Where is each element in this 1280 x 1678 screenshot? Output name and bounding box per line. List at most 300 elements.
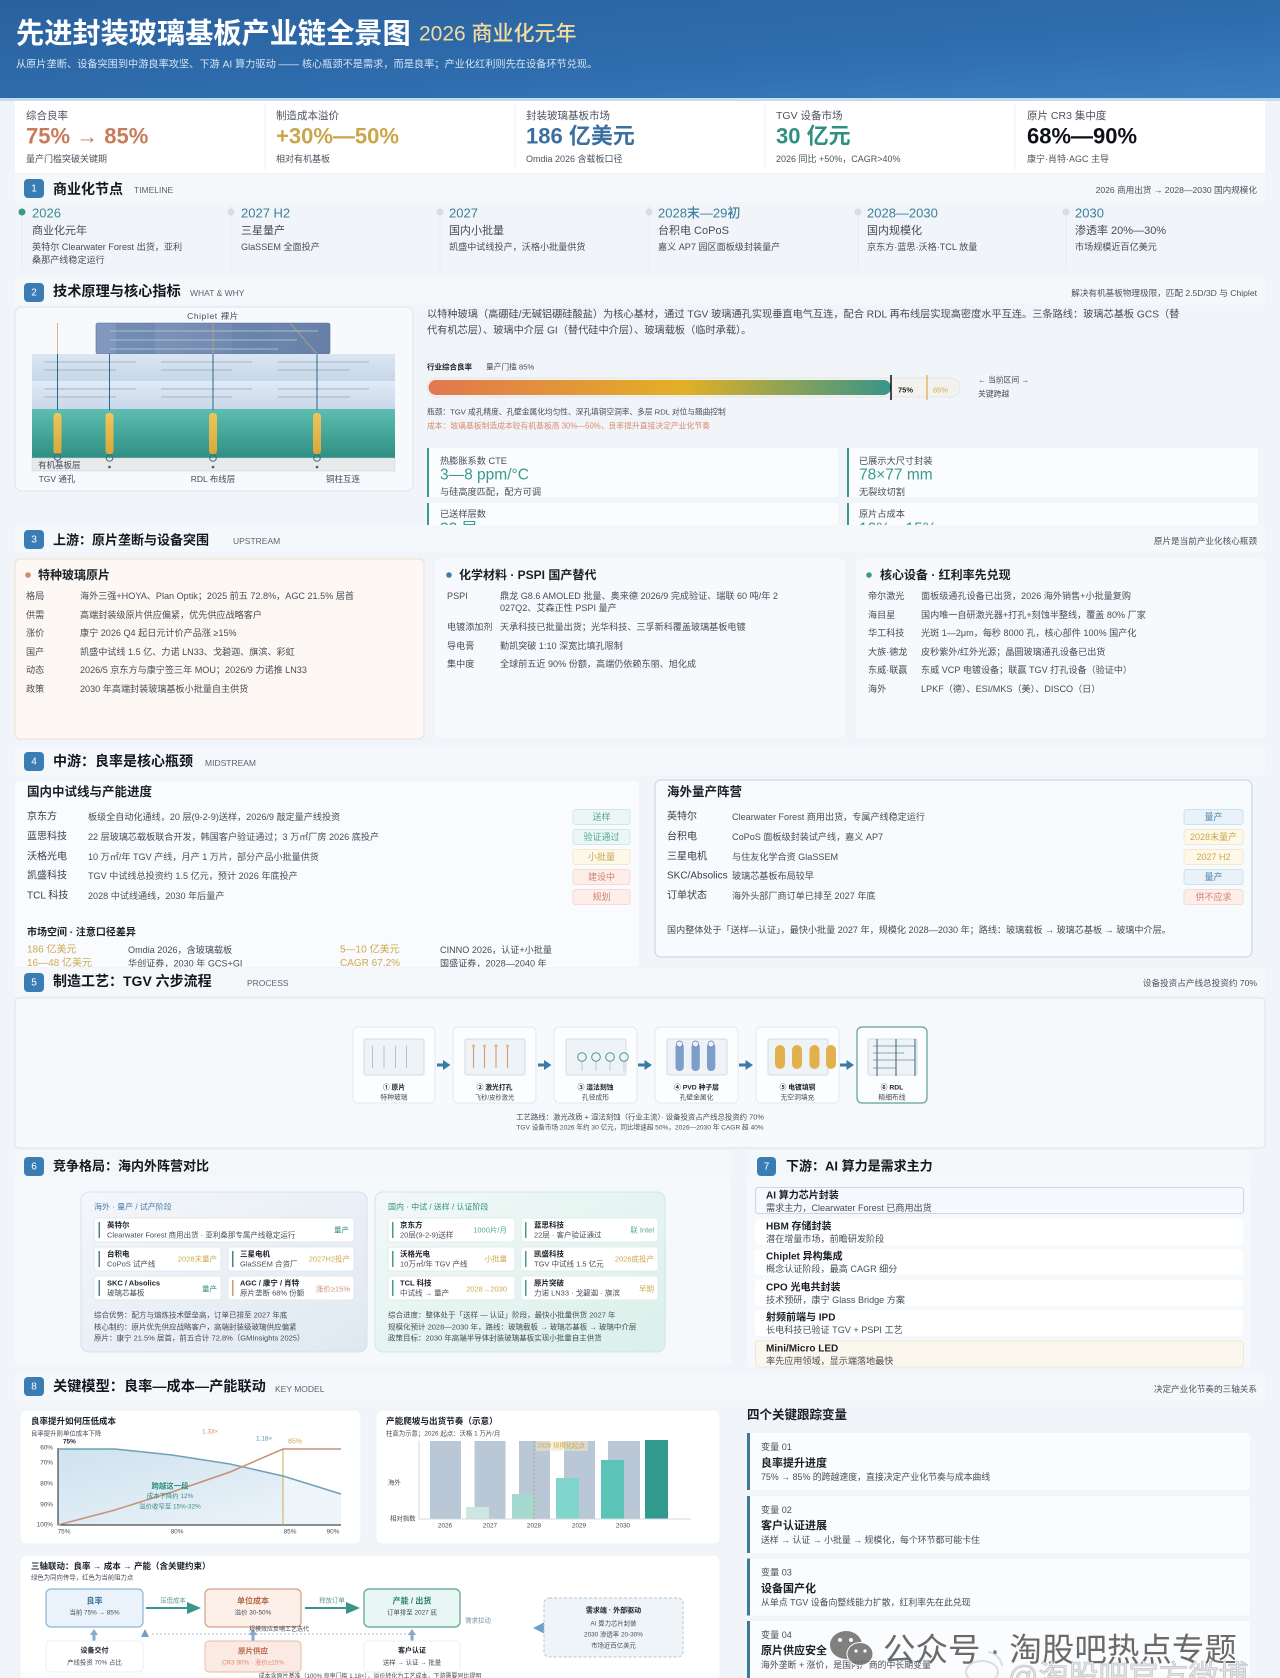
chart annotation <box>139 1482 201 1510</box>
watermark <box>830 1631 1248 1678</box>
company cards: 沃格光电 <box>400 1248 430 1258</box>
bottleneck and cost notes: 成本：玻璃基板制造成本较有机基板高 30%—50%，良率提升直接决定产业化节奏 <box>427 420 710 430</box>
market space notes: 16—48 亿美元 <box>27 956 92 969</box>
icon: wechat <box>830 1631 873 1666</box>
metric: raw glass cost share: 10%—15% <box>859 520 937 538</box>
market space notes: 国盛证券，2028—2040 年 <box>440 958 547 968</box>
section 1 heading: 商业化节点 <box>53 181 123 197</box>
y axis labels: 90% <box>40 1502 53 1508</box>
company cards: 玻璃芯基板 <box>107 1288 145 1298</box>
glass substrate cross-section diagram <box>15 307 413 491</box>
section 6 heading <box>15 1150 731 1177</box>
RDL layers <box>32 354 395 409</box>
yield line <box>58 1449 341 1525</box>
overseas rows: 玻璃芯基板布局较早 <box>732 870 814 881</box>
demand: CPO: CPO 光电共封装 <box>766 1280 840 1294</box>
table rows: 供需 <box>26 609 44 620</box>
bottleneck and cost notes <box>427 406 726 430</box>
company cards: 涨价≥15% <box>316 1284 350 1294</box>
technology description: 代有机芯层）、玻璃中介层 GI（替代硅中介层）、玻璃载板（临时承载）。 <box>427 324 751 336</box>
x axis labels: 90% <box>327 1528 340 1536</box>
panel: special glass <box>15 559 424 739</box>
company cards: 量产 <box>334 1224 349 1234</box>
table rows: 华工科技 <box>868 627 904 638</box>
table rows: 动态 <box>26 664 44 675</box>
company cards <box>94 1218 354 1300</box>
table rows: 东威·联赢 <box>868 664 907 675</box>
chart labels: 相对指数 <box>390 1514 416 1522</box>
demand: Chiplet: 概念认证阶段，最高 CAGR 细分 <box>766 1263 897 1274</box>
section 3 heading: UPSTREAM <box>233 536 280 546</box>
KPI: substrate market <box>526 109 635 164</box>
chiplet die <box>96 311 330 354</box>
KPI: TGV market <box>776 109 901 164</box>
KPI: TGV market: 2026 同比 +50%，CAGR>40% <box>776 153 901 164</box>
arrow: demand <box>533 1622 544 1634</box>
process notes: TGV 设备市场 2026 年约 30 亿元，同比增速超 50%，2026—2030 年 CAGR 超 40% <box>516 1122 764 1132</box>
overseas rows: 2028末量产 <box>1190 831 1237 842</box>
KPI: substrate market: Omdia 2026 含载板口径 <box>526 153 623 164</box>
chart: capacity ramp <box>376 1410 720 1544</box>
domestic summary <box>388 1310 637 1342</box>
milestone 2030 <box>1075 206 1166 252</box>
market space notes: CINNO 2026，认证+小批量 <box>440 944 552 955</box>
variable 04 <box>747 1621 1250 1678</box>
chart labels: 2029 <box>572 1522 587 1530</box>
variable 04: 原片供应安全 <box>761 1643 827 1657</box>
section 1 heading: TIMELINE <box>134 185 174 195</box>
progress rows: 京东方 <box>27 810 57 822</box>
data callouts: 85% <box>288 1438 302 1446</box>
chart: yield vs cost: 良率提升则单位成本下降 <box>31 1428 102 1438</box>
domestic summary: 政策目标：2030 年高端半导体封装玻璃基板实现小批量自主供货 <box>388 1332 602 1342</box>
step 3: 孔径成形 <box>582 1092 609 1102</box>
watermark: 公众号 · 淘股吧热点专题 <box>883 1632 1237 1668</box>
company cards: 2026底投产 <box>615 1254 654 1264</box>
demand: CPO <box>755 1280 1243 1306</box>
node: glass supply: 原片供应 <box>238 1646 268 1656</box>
section 2 heading: 技术原理与核心指标 <box>53 283 181 300</box>
panel: core equipment: 核心设备 · 红利率先兑现 <box>880 567 1011 582</box>
metric: CTE: 3—8 ppm/°C <box>440 466 529 484</box>
overseas bars <box>430 1441 640 1519</box>
panel: overseas mass production: 海外量产阵营 <box>667 784 742 799</box>
technology description <box>427 308 1179 336</box>
TGV process flow <box>15 998 1265 1148</box>
overseas rows: CoPoS 面板级封装试产线，嘉义 AP7 <box>732 831 883 842</box>
step 4: 孔壁金属化 <box>680 1092 714 1102</box>
demand: HBM <box>755 1219 1243 1245</box>
metric cards <box>427 448 1258 525</box>
KPI: CR3: 原片 CR3 集中度 <box>1027 109 1107 122</box>
KPI: CR3: 康宁·肖特·AGC 主导 <box>1027 153 1109 164</box>
table rows: LPKF（德）、ESI/MKS（美）、DISCO（日） <box>921 683 1100 694</box>
metric: CTE: 热膨胀系数 CTE <box>440 455 507 466</box>
section 3 heading: 3 <box>31 534 37 546</box>
company cards: CoPoS 试产线 <box>107 1258 156 1268</box>
panel: chemical materials <box>435 559 845 738</box>
data callouts: 1.33× <box>202 1428 218 1436</box>
table rows: 格局 <box>26 590 44 601</box>
arrow: release orders <box>305 1596 360 1614</box>
arrow: lower cost <box>146 1596 201 1614</box>
node: yield <box>46 1589 143 1627</box>
progress rows: 规划 <box>592 891 611 902</box>
y axis labels: 80% <box>40 1480 53 1488</box>
y axis labels: 70% <box>40 1460 53 1466</box>
data callouts <box>63 1428 302 1446</box>
company cards: 22层 · 客户验证通过 <box>534 1230 602 1240</box>
company cards: 三星电机 <box>240 1248 270 1258</box>
x axis labels <box>58 1528 340 1536</box>
milestone 2026: 英特尔 Clearwater Forest 出货，亚利 <box>32 241 182 252</box>
KPI: cost premium: +30%—50% <box>276 124 399 148</box>
milestone 2028-29: 2028末—29初 <box>658 206 740 220</box>
table rows: 勤凯突破 1:10 深宽比填孔限制 <box>500 640 623 651</box>
overseas rows: 三星电机 <box>667 850 707 862</box>
section 4 heading: 4 <box>31 756 37 768</box>
chart labels: 2030 <box>616 1522 631 1530</box>
section 1 heading <box>15 175 1265 202</box>
feedback arrows: 规模效应反哺工艺迭代 <box>249 1625 309 1633</box>
company cards: 力诺 LN33 · 戈碧迦 · 旗滨 <box>534 1288 620 1298</box>
section 7 heading <box>747 1150 1251 1177</box>
company cards: Clearwater Forest 商用出货 · 亚利桑那专属产线稳定运行 <box>107 1230 296 1240</box>
arrow <box>538 1060 552 1070</box>
milestone 2027: 国内小批量 <box>449 223 504 237</box>
node: equipment delivery <box>46 1641 143 1672</box>
table rows: 鼎龙 G8.6 AMOLED 批量、奥来德 2026/9 完成验证、瑞联 60 吨/年 2 <box>500 590 778 601</box>
chart: capacity ramp: 柱高为示意；2026 起点：沃格 1 万片/月 <box>386 1428 500 1438</box>
domestic summary: 国内整体处于「送样—认证」，最快小批量 2027 年，规模化 2028—2030 年；路线：玻璃载板 → 玻璃芯基板 → 玻璃中介层。 <box>667 924 1171 935</box>
chart labels: 海外 <box>388 1478 401 1486</box>
demand: RF and IPD: 长电科技已验证 TGV + PSPI 工艺 <box>766 1324 903 1335</box>
section 2 heading: 解决有机基板物理极限，匹配 2.5D/3D 与 Chiplet <box>1071 287 1258 298</box>
overseas summary: 综合优势：配方与熔炼技术壁垒高，订单已排至 2027 年底 <box>94 1310 288 1320</box>
section 6: competition panel <box>15 1150 731 1365</box>
cost line <box>58 1449 341 1494</box>
progress rows: 沃格光电 <box>27 850 67 862</box>
node: equipment delivery: 设备交付 <box>80 1646 108 1654</box>
progress rows: 送样 <box>592 811 611 822</box>
milestone 2027 H2: 2027 H2 <box>241 206 290 220</box>
arrow <box>739 1060 753 1070</box>
chart labels: 2028 规模化起点 <box>537 1440 586 1450</box>
variable 04: 变量 04 <box>761 1629 792 1640</box>
chart labels: 2026 <box>438 1522 453 1530</box>
company cards: 量产 <box>202 1284 217 1294</box>
yield progress bar: 行业综合良率 <box>427 362 472 372</box>
variable 03: 变量 03 <box>761 1566 792 1578</box>
node: demand: 市场近百亿美元 <box>591 1640 636 1650</box>
yield progress bar <box>427 362 1029 400</box>
step 1: 特种玻璃 <box>380 1092 408 1102</box>
metric: raw glass cost share: 原片占成本 <box>859 508 905 519</box>
section 6 heading: 竞争格局：海内外阵营对比 <box>53 1158 209 1174</box>
company cards: 台积电 <box>107 1248 130 1258</box>
data callouts: 75% <box>63 1438 76 1446</box>
company cards: 联 Intel <box>630 1226 654 1234</box>
table rows: 027Q2、艾森正性 PSPI 量产 <box>500 602 617 613</box>
chart labels <box>388 1440 631 1530</box>
market space notes: 市场空间 · 注意口径差异 <box>27 926 136 938</box>
panel: special glass: 特种玻璃原片 <box>38 567 110 582</box>
progress rows: TGV 中试线总投资约 1.5 亿元，预计 2026 年底投产 <box>88 870 298 881</box>
metric: layers: 22 层 <box>440 520 477 538</box>
node: capacity <box>364 1589 460 1627</box>
milestone 2026: 2026 <box>32 206 61 220</box>
milestone 2026 <box>32 206 182 265</box>
node: glass supply <box>205 1641 301 1672</box>
KPI: yield: 量产门槛突破关键期 <box>26 153 107 164</box>
arrow <box>638 1060 652 1070</box>
demand: Mini/Micro LED: Mini/Micro LED <box>766 1344 838 1354</box>
node: customer certification: 送样 → 认证 → 批量 <box>383 1658 442 1666</box>
variable 01: 变量 01 <box>761 1441 792 1452</box>
company cards: AGC / 康宁 / 肖特 <box>240 1278 300 1288</box>
table rows: 集中度 <box>447 658 474 669</box>
step 1 <box>353 1027 435 1103</box>
overseas rows: 供不应求 <box>1195 891 1232 902</box>
company cards: TCL 科技 <box>400 1278 432 1288</box>
metric: layers <box>427 503 838 525</box>
section 5 heading: 5 <box>31 978 37 988</box>
progress rows: 10 万㎡/年 TGV 产线，月产 1 万片，部分产品小批量供货 <box>88 851 319 862</box>
tracking variables: 四个关键跟踪变量 <box>747 1407 847 1422</box>
table rows: 2026/5 京东方与康宁签三年 MOU；2026/9 力诺推 LN33 <box>80 664 307 675</box>
data callouts: 1.18× <box>256 1436 272 1442</box>
progress rows: 2028 中试线通线，2030 年后量产 <box>88 890 224 901</box>
progress rows: 凯盛科技 <box>27 868 67 882</box>
node: yield: 当前 75% → 85% <box>69 1608 120 1616</box>
KPI: yield <box>26 109 148 164</box>
company cards: 2027H2投产 <box>309 1254 350 1264</box>
progress rows: 22 层玻璃芯载板联合开发，韩国客户验证通过；3 万㎡厂房 2026 底投产 <box>88 831 379 842</box>
company cards: 英特尔 <box>107 1220 130 1230</box>
KPI: yield: 75% → 85% <box>26 124 148 148</box>
step 3: ③ 湿法刻蚀 <box>578 1082 614 1092</box>
table rows: 高端封装级原片供应偏紧，优先供应战略客户 <box>80 609 262 620</box>
metric: package size <box>847 448 1258 497</box>
overseas rows: 英特尔 <box>667 810 697 822</box>
table rows: 政策 <box>26 683 44 694</box>
node: unit cost: 溢价 30-50% <box>235 1608 272 1616</box>
milestone 2026: 桑那产线稳定运行 <box>32 254 105 265</box>
y axis labels: 100% <box>37 1522 53 1528</box>
section 5 heading: 设备投资占产线总投资约 70% <box>1143 977 1257 988</box>
milestone 2028-2030: 京东方·蓝思·沃格·TCL 放量 <box>867 241 977 252</box>
domestic summary: 规模化预计 2028—2030 年，路线：玻璃载板 → 玻璃芯基板 → 玻璃中介层 <box>388 1322 637 1332</box>
KPI: substrate market: 封装玻璃基板市场 <box>526 109 610 122</box>
node: unit cost <box>205 1589 301 1627</box>
overseas rows: 量产 <box>1204 811 1223 822</box>
section 6 heading: 6 <box>31 1162 37 1172</box>
yield progress bar: 量产门槛 85% <box>486 362 534 372</box>
yield progress bar: 关键跨越 <box>978 388 1009 398</box>
overseas rows: 海外头部厂商订单已排至 2027 年底 <box>732 890 876 901</box>
market space notes: 华创证券，2030 年 GCS+GI <box>128 958 242 968</box>
demand: RF and IPD <box>755 1310 1243 1336</box>
milestone 2028-2030: 2028—2030 <box>867 206 938 220</box>
section 4 heading: MIDSTREAM <box>205 758 256 768</box>
table rows: 全球前五近 90% 份额，高端仍依赖东丽、旭化成 <box>500 658 696 669</box>
table rows: 国产 <box>26 646 44 657</box>
table rows <box>447 590 778 669</box>
section 2 heading: 2 <box>31 288 37 298</box>
section 7 heading: 7 <box>764 1162 770 1172</box>
KPI: cost premium <box>276 109 399 164</box>
node: yield: 良率 <box>86 1596 102 1606</box>
domestic camp: 国内 · 中试 / 送样 / 认证阶段 <box>388 1202 488 1212</box>
step 4 <box>655 1027 738 1103</box>
step 6: ⑥ RDL <box>881 1084 903 1092</box>
overseas rows: 量产 <box>1204 871 1223 882</box>
milestone 2028-2030: 国内规模化 <box>867 223 922 237</box>
overseas rows: 订单状态 <box>667 888 707 902</box>
node: demand <box>544 1598 683 1657</box>
section 7: downstream panel <box>747 1150 1251 1367</box>
KPI strip <box>15 101 1265 173</box>
section 3 heading: 上游：原片垄断与设备突围 <box>53 532 209 548</box>
organic substrate <box>32 454 395 471</box>
milestone 2030: 渗透率 20%—30% <box>1075 223 1166 237</box>
chiplet die: Chiplet 裸片 <box>187 311 239 321</box>
progress rows <box>27 810 630 904</box>
KPI: substrate market: 186 亿美元 <box>526 124 635 148</box>
demand: Mini/Micro LED: 率先应用领域，显示端落地最快 <box>766 1355 893 1366</box>
section 7 heading: 下游：AI 算力是需求主力 <box>786 1158 933 1174</box>
overseas summary: 核心制约：原片优先供应战略客户，高端封装级玻璃供应偏紧 <box>94 1322 297 1332</box>
section 3 heading: 原片是当前产业化核心瓶颈 <box>1154 535 1257 546</box>
demand: RF and IPD: 射频前端与 IPD <box>766 1310 835 1324</box>
table rows: PSPI <box>447 591 468 601</box>
KPI: cost premium: 制造成本溢价 <box>276 109 339 122</box>
section 4 heading: 中游：良率是核心瓶颈 <box>53 753 193 769</box>
area and axes <box>58 1449 341 1525</box>
y axis labels: 60% <box>40 1444 53 1452</box>
milestone 2028-29 <box>658 206 780 252</box>
x axis labels: 85% <box>284 1528 297 1536</box>
panel: domestic pilot lines: 国内中试线与产能进度 <box>27 784 153 799</box>
arrow <box>840 1060 854 1070</box>
header banner <box>0 0 1280 101</box>
node: demand: 需求端 · 外部驱动 <box>586 1606 641 1614</box>
KPI: TGV market: 30 亿元 <box>776 124 851 148</box>
company cards: 京东方 <box>400 1220 423 1230</box>
demand: Chiplet: Chiplet 异构集成 <box>766 1250 843 1262</box>
node: demand: AI 算力芯片封装 <box>590 1618 637 1628</box>
metric: CTE: 与硅高度匹配，配方可调 <box>440 486 541 497</box>
node: glass supply: CR3 90% · 涨价≥15% <box>222 1658 284 1666</box>
panel: core equipment <box>856 559 1265 738</box>
chart annotation: 跨越这一段 <box>152 1482 189 1490</box>
company cards: 中试线 → 量产 <box>400 1288 449 1298</box>
section 4 heading <box>15 747 1265 775</box>
variable 04: 海外垄断 + 涨价，是国内厂商的中长期变量 <box>761 1659 931 1670</box>
milestone 2027 H2: 三星量产 <box>241 223 285 237</box>
demand: Chiplet <box>755 1249 1243 1275</box>
demand: AI chips: 需求主力，Clearwater Forest 已商用出货 <box>766 1202 932 1213</box>
technology description: 以特种玻璃（高硼硅/无碱铝硼硅酸盐）为核心基材，通过 TGV 玻璃通孔实现垂直电气互连，配合 RDL 再布线层实现高密度水平互连。三条路线：玻璃芯基板 GCS（替 <box>427 308 1179 320</box>
demand: AI chips <box>756 1188 1244 1214</box>
metric: package size: 无裂纹切割 <box>859 486 905 497</box>
chart annotation: 成本下降约 12% <box>147 1491 194 1500</box>
yield progress bar: 85% <box>933 386 948 394</box>
y axis labels <box>37 1444 53 1528</box>
chart: yield vs cost <box>20 1410 361 1544</box>
milestone 2027 H2 <box>241 206 320 252</box>
table rows: 海外 <box>868 683 886 694</box>
subtitle: 从原片垄断、设备突围到中游良率攻坚、下游 AI 算力驱动 —— 核心瓶颈不是需求，而是良率；产业化红利则先在设备环节兑现。 <box>16 58 597 70</box>
step 1: ① 原片 <box>383 1082 405 1092</box>
step 2: ② 激光打孔 <box>477 1082 513 1092</box>
KPI: TGV market: TGV 设备市场 <box>776 109 843 122</box>
step 5: ⑤ 电镀填铜 <box>780 1082 816 1092</box>
progress rows: 蓝思科技 <box>27 830 67 842</box>
section 8 heading: 关键模型：良率—成本—产能联动 <box>53 1378 266 1395</box>
table rows: 光斑 1—2μm，每秒 8000 孔，核心部件 100% 国产化 <box>921 627 1136 638</box>
node: capacity: 产能 / 出货 <box>393 1596 431 1606</box>
section 2 heading <box>15 278 1265 305</box>
diagram labels <box>39 474 360 484</box>
variable 02: 送样 → 认证 → 小批量 → 规模化，每个环节都可能卡住 <box>761 1534 980 1545</box>
company cards: 2028末量产 <box>178 1254 217 1264</box>
panel: chemical materials: 化学材料 · PSPI 国产替代 <box>459 567 596 582</box>
arrow <box>437 1060 450 1070</box>
yield progress bar: 75% <box>898 386 913 394</box>
market space notes: Omdia 2026，含玻璃载板 <box>128 944 232 955</box>
node: customer certification <box>364 1641 460 1672</box>
company cards <box>388 1218 658 1300</box>
table rows: 涨价 <box>26 628 44 638</box>
node: customer certification: 客户认证 <box>398 1646 426 1654</box>
step 2 <box>453 1027 536 1103</box>
panel: domestic pilot lines <box>15 781 639 969</box>
node: demand: 2030 渗透率 20-30% <box>584 1630 643 1638</box>
milestone 2027 <box>449 206 585 252</box>
milestone 2028-29: 台积电 CoPoS <box>658 223 729 237</box>
variable 03: 从单点 TGV 设备向整线能力扩散，红利率先在此兑现 <box>761 1596 971 1608</box>
milestone 2030: 2030 <box>1075 206 1104 220</box>
overseas rows: 2027 H2 <box>1196 852 1231 862</box>
x axis labels: 80% <box>171 1528 184 1536</box>
diagram labels: RDL 布线层 <box>191 474 235 484</box>
table rows: 凯盛中试线 1.5 亿、力诺 LN33、戈碧迦、旗滨、彩虹 <box>80 646 295 657</box>
diagram labels: TGV 通孔 <box>39 474 76 484</box>
progress rows: TCL 科技 <box>27 888 68 902</box>
company cards: 1000片/月 <box>473 1224 507 1234</box>
domestic summary: 综合进度：整体处于「送样 — 认证」阶段，最快小批量供货 2027 年 <box>388 1310 616 1320</box>
table rows: 2030 年高端封装玻璃基板小批量自主供货 <box>80 683 248 694</box>
company cards: SKC / Absolics <box>107 1278 160 1288</box>
progress rows: 验证通过 <box>583 831 620 842</box>
table rows: 皮秒紫外/红外光源；晶圆玻璃通孔设备已出货 <box>921 646 1105 657</box>
demand: AI chips: AI 算力芯片封装 <box>766 1188 839 1202</box>
step 5 <box>756 1027 839 1103</box>
metric: package size: 78×77 mm <box>859 466 933 484</box>
diagram: three-axis linkage: 绿色为同向传导，红色为当前阻力点 <box>31 1572 134 1582</box>
section 8 heading: 决定产业化节奏的三轴关系 <box>1154 1383 1257 1394</box>
company cards: TGV 中试线 1.5 亿元 <box>534 1258 604 1268</box>
tracking variables <box>747 1407 1250 1678</box>
demand drive label: 需求拉动 <box>465 1616 491 1624</box>
title: 先进封装玻璃基板产业链全景图 <box>16 17 411 49</box>
diagram labels: 铜柱互连 <box>326 474 360 484</box>
x axis labels: 75% <box>58 1528 71 1536</box>
milestone 2027: 凯盛中试线投产，沃格小批量供货 <box>449 241 585 252</box>
step 2: 飞秒/皮秒激光 <box>475 1092 515 1102</box>
diagram: three-axis linkage: 三轴联动：良率 → 成本 → 产能（含关键约束） <box>31 1561 210 1571</box>
